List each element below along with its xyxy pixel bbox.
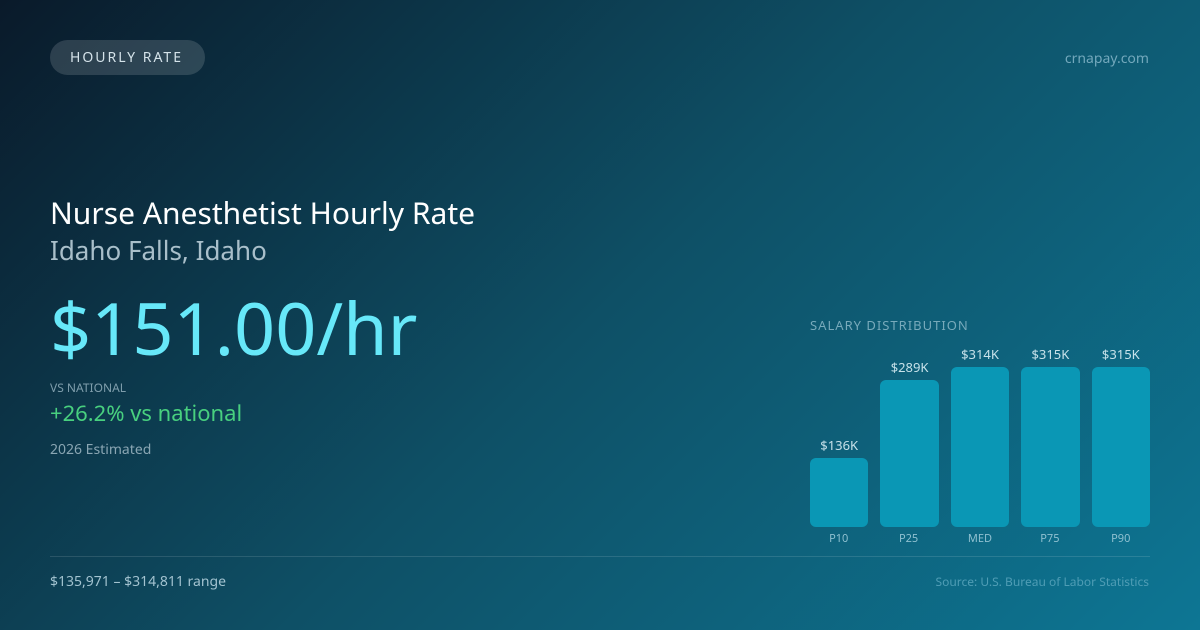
- bar P90: P90: [1111, 531, 1130, 546]
- comparison value: +26.2% vs national: [50, 398, 242, 428]
- comparison label: VS NATIONAL: [50, 379, 126, 396]
- bar P10: P10: [829, 531, 848, 546]
- bar P90: [1092, 345, 1150, 546]
- bar P90: $315K: [1102, 345, 1140, 363]
- bar median: MED: [968, 531, 992, 546]
- bar median: $314K: [961, 345, 999, 363]
- bar P10: $136K: [820, 436, 858, 454]
- estimate note: 2026 Estimated: [50, 440, 151, 459]
- bar P25: P25: [899, 531, 918, 546]
- badge: hourly rate: HOURLY RATE: [70, 48, 183, 67]
- location subtitle: Idaho Falls, Idaho: [50, 232, 267, 268]
- badge: hourly rate: [50, 40, 205, 75]
- title: Nurse Anesthetist Hourly Rate: [50, 192, 475, 233]
- bar median: [951, 345, 1009, 546]
- site name: crnapay.com: [1065, 49, 1149, 68]
- bar P25: $289K: [891, 358, 928, 376]
- chart heading: SALARY DISTRIBUTION: [810, 316, 969, 334]
- bar P75: $315K: [1031, 345, 1069, 363]
- salary range: $135,971 – $314,811 range: [50, 572, 226, 591]
- main hourly rate: $151.00/hr: [50, 279, 417, 377]
- bar P25: [880, 358, 939, 546]
- bar P75: [1021, 345, 1080, 546]
- source note: Source: U.S. Bureau of Labor Statistics: [936, 573, 1149, 590]
- bar P10: [810, 436, 868, 546]
- bar P75: P75: [1040, 531, 1060, 546]
